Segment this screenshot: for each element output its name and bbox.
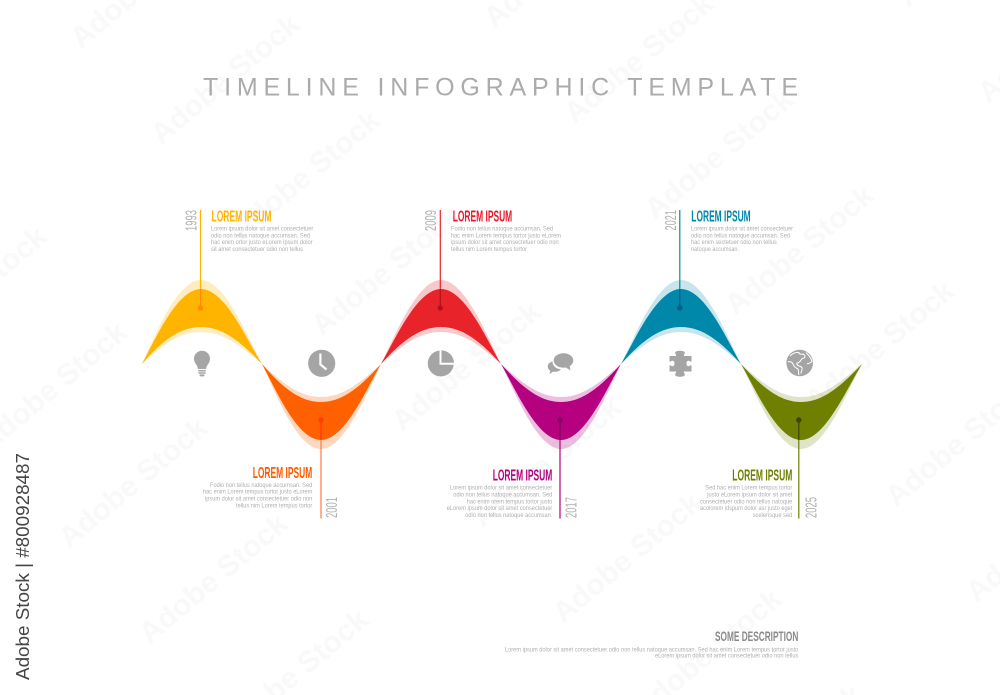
year: 1993 (184, 210, 200, 231)
timeline item: 2025 (700, 364, 862, 519)
icon: light bulb (194, 351, 210, 376)
heading: LOREM IPSUM (253, 465, 312, 482)
body text: consectetuer odio non tellus natoque (700, 499, 793, 505)
heading: LOREM IPSUM (453, 208, 512, 225)
icon: puzzle piece (670, 351, 692, 377)
wave segment: yellow (142, 280, 262, 364)
heading: LOREM IPSUM (212, 208, 272, 225)
body text: Lorem ipsum dolor sit amet consectetuer (450, 485, 552, 491)
body text (447, 485, 553, 519)
body text: hac enim Lorem tempus tortor justo eLorem (451, 233, 561, 239)
marker line and dot (677, 210, 682, 311)
description text (505, 647, 799, 660)
body text: Sed hac enim Lorem tempus tortor (705, 485, 792, 491)
year: 2001 (324, 497, 341, 518)
timeline item: 1993 (142, 208, 313, 364)
year: 2025 (804, 497, 820, 518)
marker line and dot (557, 417, 563, 518)
body text: tellus nim Lorem tempus tortor (236, 504, 312, 510)
description heading: SOME DESCRIPTION (715, 628, 798, 644)
body text: justo eLorem ipsum dolor sit amet (706, 492, 793, 498)
body text (211, 226, 313, 253)
icon: speech bubbles (548, 353, 573, 374)
body text: hac enim orem tempus tortor justo (467, 499, 553, 505)
body text: tellus nim Lorem tempus tortor (451, 247, 527, 253)
wave segment: orange (262, 364, 381, 449)
icon: pie chart (428, 350, 454, 376)
body text: acolorem idspum dolor asr justo eget (700, 506, 793, 512)
heading: LOREM IPSUM (732, 468, 792, 484)
body text: hac enim Lorem tempus tortor justo eLorem (203, 490, 312, 496)
body text: Lorem ipsum dolor sit amet consectetuer (211, 226, 313, 232)
heading: LOREM IPSUM (493, 468, 552, 484)
title: TIMELINE INFOGRAPHIC TEMPLATE (203, 74, 798, 102)
body text: scelerisque sed (753, 513, 792, 519)
body text: Lorem ipsum dolor sit amet consectetuer (691, 226, 793, 232)
marker line and dot (796, 417, 802, 518)
body text: odio non tellus natoque accumsan. Sed (211, 233, 310, 239)
body text: Fodio non tellus natoque accumsan. Sed (210, 483, 312, 489)
year: 2017 (564, 497, 580, 518)
body text: odio non tellus natoque accumsan. (465, 513, 553, 519)
body text: hac enim ortor justo eLorem ipsum dolor (211, 240, 312, 246)
body text: Fodio non tellus natoque accumsan. Sed (451, 226, 553, 232)
wave segment: purple (501, 364, 621, 449)
wave segment: olive (741, 364, 862, 449)
body text: odio non tellus natoque accumsan. Sed (691, 233, 790, 239)
description text: Lorem ipsum dolor sit amet consectetuer odio non tellus natoque accumsan. Sed hac enim Lorem tempus tortor justo (505, 647, 799, 653)
timeline item: 2017 (447, 364, 621, 519)
body text (700, 485, 793, 519)
body text: eLorem ipsum dolor sit amet consectetuer (447, 506, 552, 512)
marker line and dot (198, 210, 203, 311)
year: 2009 (423, 210, 440, 231)
body text (691, 226, 793, 253)
timeline item: 2009 (381, 208, 561, 364)
description block (505, 628, 799, 660)
stock side label: Adobe Stock | #800928487 (13, 453, 33, 680)
body text: ipsum dolor sit amet consectetuer odio non (451, 240, 559, 246)
description text: eLorem ipsum dolor sit amet consectetuer odio non tellus (655, 654, 798, 660)
body text: hac enim sectetuer odio non tellus (691, 240, 777, 246)
body text: natoque accumsan. (691, 247, 739, 253)
timeline item: 2021 (621, 208, 793, 364)
icon: clock (308, 350, 335, 377)
marker line and dot (438, 210, 443, 311)
wave segment: red (381, 280, 501, 364)
year: 2021 (663, 210, 680, 230)
icon: globe (786, 350, 813, 376)
body text: sit amet consectetuer odio non tellus (211, 247, 303, 253)
marker line and dot (318, 417, 324, 518)
heading: LOREM IPSUM (691, 208, 751, 225)
body text (203, 483, 312, 510)
timeline item: 2001 (203, 364, 381, 518)
wave segment: teal (621, 280, 741, 364)
body text: ipsum dolor sit amet consectetuer odio non (205, 497, 312, 503)
body text (451, 226, 561, 253)
body text: odio non tellus natoque accumsan. Sed (453, 492, 552, 498)
